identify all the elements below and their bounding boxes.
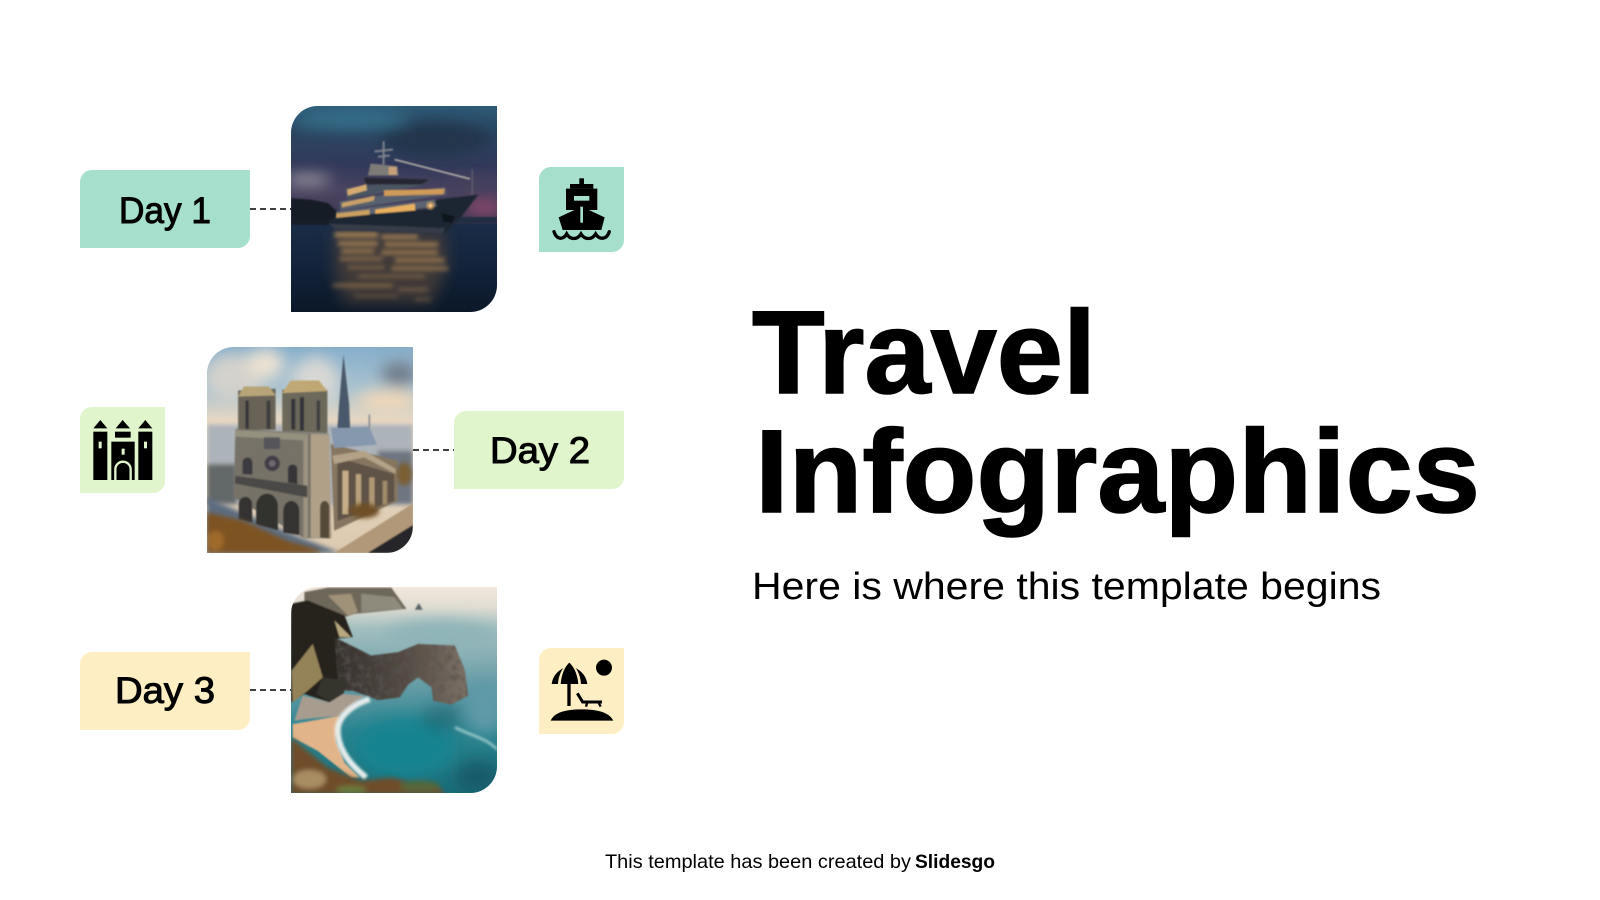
label: Day 3 [80,652,250,730]
panel: day 2 [80,347,624,553]
footer credit: This template has been created by [605,851,911,873]
label: Day 3: Day 3 [115,670,215,711]
title [752,287,1480,538]
title: Infographics [755,406,1480,538]
photo: gothic cathedral over the city [207,347,413,553]
panel: day 3 [80,587,624,794]
label: Day 1: Day 1 [119,190,211,231]
title: Travel [752,287,1096,419]
panel: day 1 [80,106,624,312]
photo: sea arch and beach [291,587,545,793]
subtitle: Here is where this template begins [752,566,1381,608]
icon tile: beach umbrella and lounger [539,648,624,734]
label: Day 1 [80,170,250,248]
connector: photo to day 2 [413,449,454,451]
icon tile: castle [80,407,165,493]
connector: day 1 to photo [250,208,292,210]
photo: cruise ship at dusk [291,106,497,312]
label: Day 2 [454,411,624,489]
infographic slide [80,106,1476,872]
connector: day 3 to photo [250,689,292,691]
icon tile: ship [539,167,624,252]
label: Day 2: Day 2 [490,430,590,471]
footer credit: Slidesgo [915,851,995,873]
